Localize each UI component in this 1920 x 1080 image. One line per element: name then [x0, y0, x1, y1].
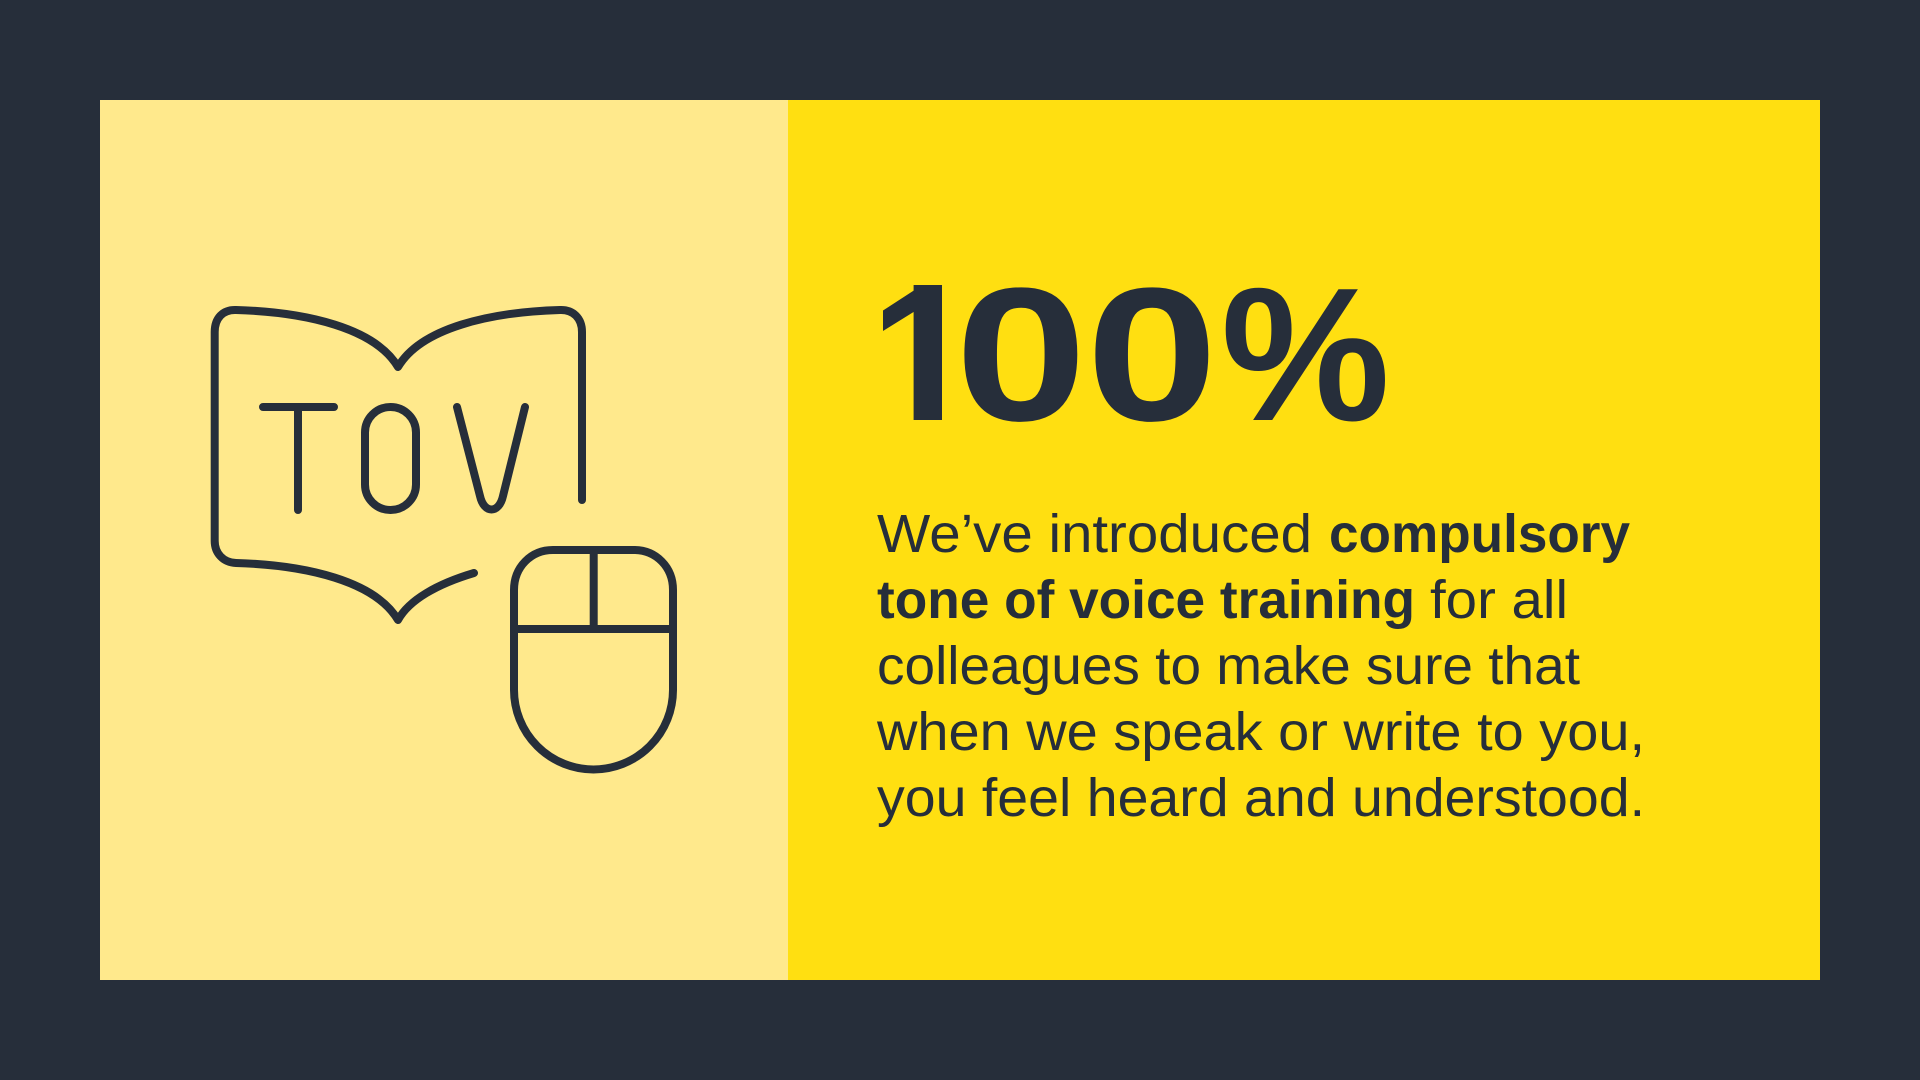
text block: description: compulsory [1329, 504, 1630, 564]
text block: description: tone of voice training [877, 570, 1415, 630]
panel: icon (pale yellow) [100, 100, 788, 980]
icon: computer mouse [514, 550, 673, 769]
text block: description: when we speak or write to you, [876, 702, 1645, 762]
icon: open book outline [215, 310, 582, 620]
icon: book with TOV and computer mouse [215, 310, 673, 769]
statistic: 100% [883, 285, 1385, 422]
icon: letters TOV [263, 407, 525, 510]
text block: description [876, 504, 1645, 828]
text block: description: you feel heard and understood. [877, 768, 1645, 828]
statistic: 100%: % [1221, 249, 1390, 461]
statistic: 100%: 0 [1086, 249, 1218, 461]
panel: statistic (bright yellow) [788, 100, 1820, 980]
text block: description: for all [1430, 570, 1568, 630]
statistic: 100%: 1 [870, 249, 976, 461]
statistic: 100%: 0 [955, 249, 1087, 461]
infographic canvas [100, 100, 1820, 980]
text block: description: colleagues to make sure that [877, 636, 1580, 696]
text block: description: We’ve introduced [877, 504, 1312, 564]
